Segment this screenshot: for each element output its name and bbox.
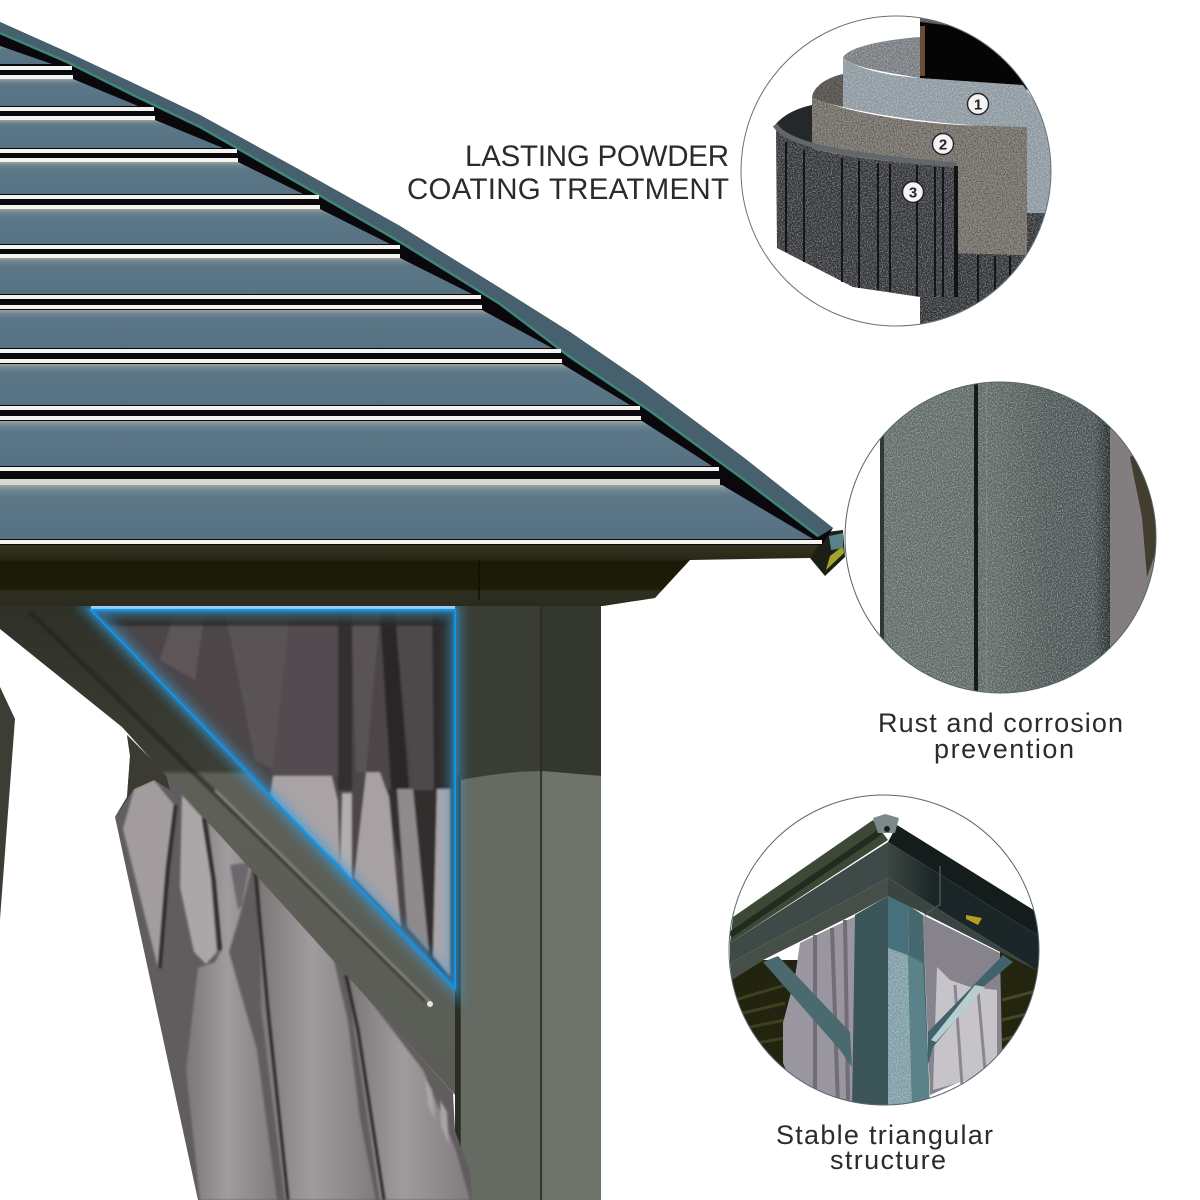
gazebo post xyxy=(455,600,601,1200)
layer 2 xyxy=(812,74,1027,255)
left curtain xyxy=(783,916,856,1110)
dark base behind layers xyxy=(920,213,1045,324)
roof rib highlights xyxy=(0,66,822,544)
caption: stable triangular xyxy=(776,1120,993,1175)
circle: powder coating layers xyxy=(741,14,1060,330)
layer 3 front xyxy=(776,130,957,297)
roof shadow base xyxy=(0,22,833,545)
caption: stable triangular: Stable triangular xyxy=(776,1120,993,1150)
right curtain xyxy=(923,915,1002,1095)
fold: narrow pleat xyxy=(180,795,217,964)
caption: stable triangular: structure xyxy=(830,1145,946,1175)
caption: rust and corrosion: Rust and corrosion xyxy=(878,708,1123,738)
badge 2: 2 xyxy=(939,136,947,154)
brace screw xyxy=(427,1001,433,1007)
diagonal triangular brace xyxy=(0,598,455,1095)
post seams xyxy=(880,435,884,640)
warning label xyxy=(966,915,982,925)
layer 3 rim xyxy=(775,125,957,165)
layer 1 xyxy=(843,37,1055,213)
brace ridge shadow xyxy=(30,612,426,1000)
circle: rust prevention post close-up xyxy=(845,380,1160,696)
ceiling left xyxy=(728,960,800,1070)
roof edge band xyxy=(0,22,833,537)
fold: cuff xyxy=(123,780,174,968)
badge 2 xyxy=(932,134,954,154)
roof corner cap xyxy=(810,530,845,576)
back core xyxy=(920,22,1028,90)
textured post xyxy=(880,380,1110,696)
sunlit lower post xyxy=(461,771,601,1200)
layer 3 grooves xyxy=(786,142,943,297)
circle outline xyxy=(741,16,1051,326)
right fascia xyxy=(888,842,1040,972)
fold: third pleat xyxy=(186,822,277,1200)
circle outline xyxy=(729,795,1039,1105)
left brace xyxy=(763,956,852,1067)
roof edge strips xyxy=(730,820,888,943)
photo: lower curtain panel xyxy=(115,735,472,1200)
badge 1: 1 xyxy=(974,96,982,114)
caption: rust and corrosion: prevention xyxy=(934,734,1074,764)
ceiling right xyxy=(1000,952,1038,1052)
caption: rust and corrosion xyxy=(878,708,1123,764)
right brace xyxy=(928,955,1013,1065)
lit curtain folds xyxy=(269,776,340,866)
eave fascia xyxy=(0,530,845,606)
roof xyxy=(0,22,833,545)
left fascia xyxy=(730,842,888,963)
layer 3 inner xyxy=(775,105,812,150)
roof finial xyxy=(873,814,899,833)
grey curtain at right xyxy=(1110,428,1154,648)
fold shadows xyxy=(160,805,384,1200)
post faces xyxy=(852,896,888,1110)
fold: fourth pleat xyxy=(259,872,376,1200)
roof panels xyxy=(0,46,813,539)
blue highlight triangle xyxy=(91,610,455,988)
badge 1 xyxy=(968,94,988,114)
heading: powder coating: LASTING POWDER xyxy=(465,140,729,173)
badge 3 xyxy=(902,182,924,202)
brace ridge highlight xyxy=(215,790,430,1002)
heading: powder coating xyxy=(407,140,729,206)
photo: small curtain at left edge xyxy=(0,687,15,919)
shaded pleats xyxy=(91,612,455,990)
fold: fifth pleat xyxy=(348,972,470,1200)
heading: powder coating: COATING TREATMENT xyxy=(407,173,729,206)
photo: curtain behind brace xyxy=(91,610,455,990)
circle outline xyxy=(845,382,1156,693)
circle: stable triangular structure xyxy=(728,795,1042,1110)
badge 3: 3 xyxy=(909,184,917,202)
